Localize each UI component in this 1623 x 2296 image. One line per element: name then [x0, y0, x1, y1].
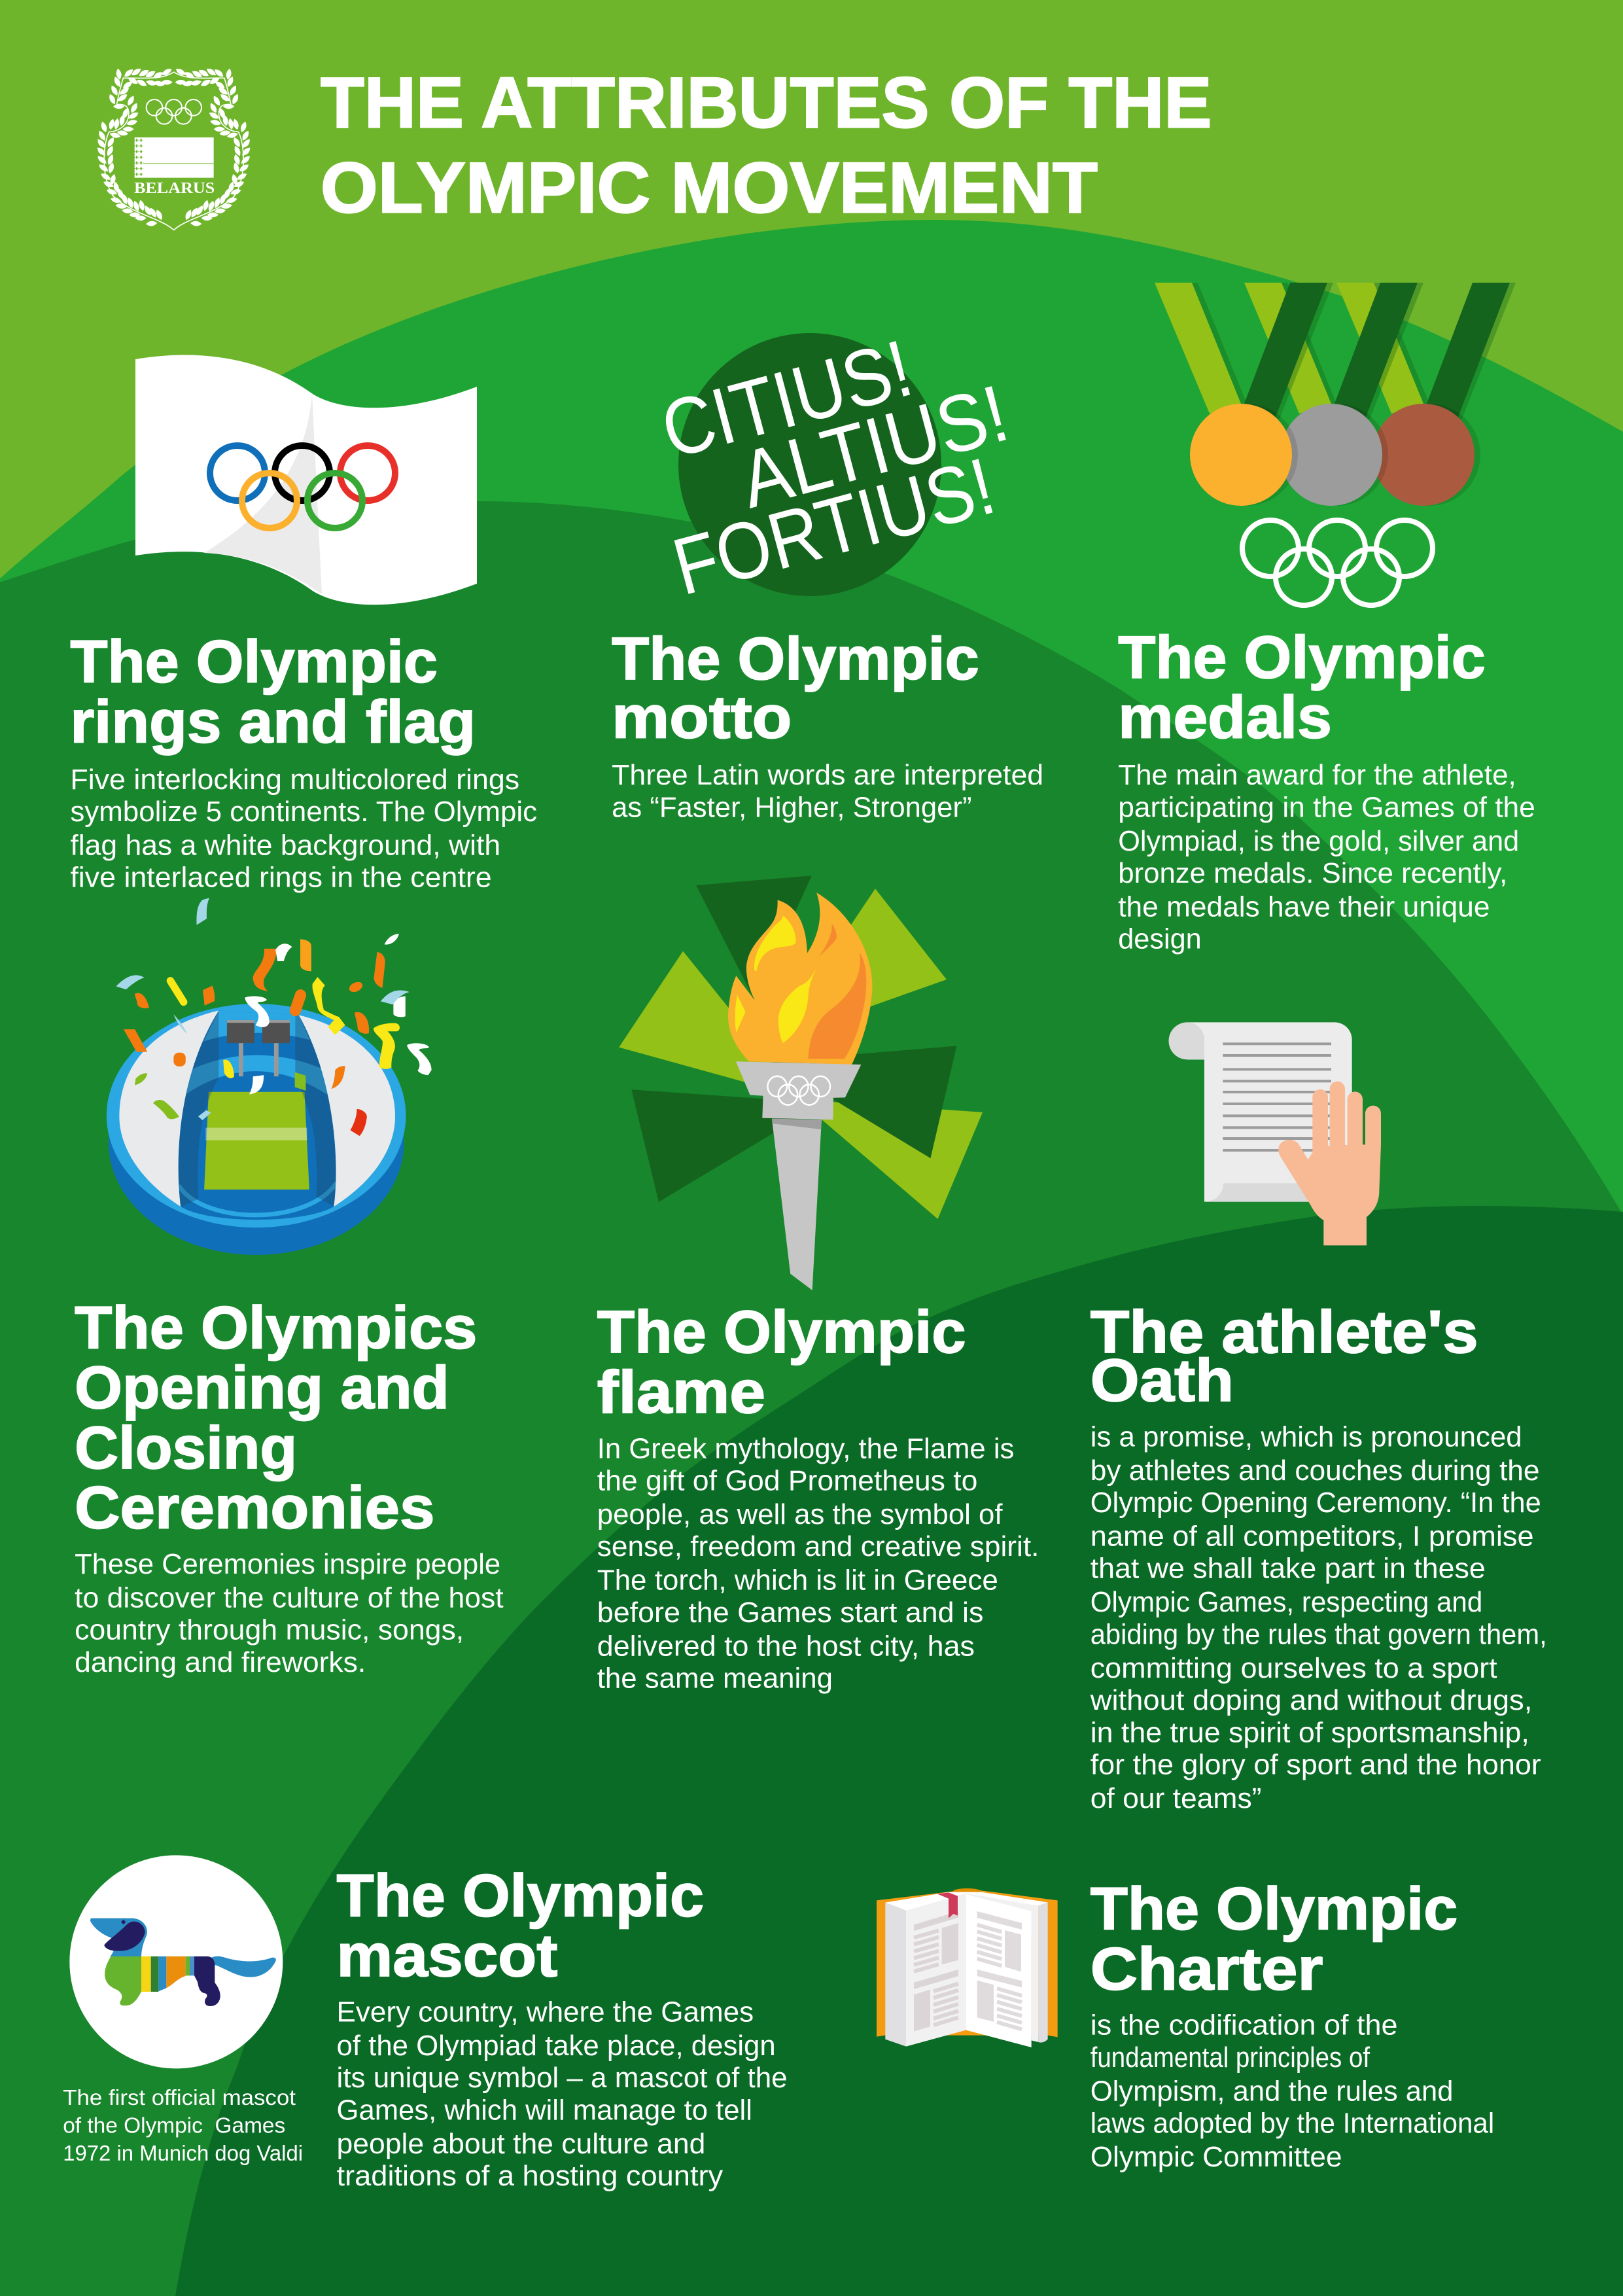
heading and text: motto [612, 626, 1043, 823]
panel: motto [612, 323, 1043, 823]
icon: Olympic torch [619, 875, 983, 1290]
heading and text: medals: The main award for the athlete, [1118, 759, 1516, 791]
heading and text: oath: that we shall take part in these [1091, 1553, 1486, 1585]
heading and text: mascot: mascot [337, 1922, 557, 1989]
panel: medals [1118, 283, 1535, 955]
heading and text: flame [597, 1299, 1039, 1694]
panel: ceremonies [75, 898, 504, 1678]
heading and text: flame: the same meaning [597, 1662, 833, 1694]
heading and text: oath: in the true spirit of sportsmanship, [1091, 1716, 1529, 1748]
title: THE ATTRIBUTES OF THE [321, 63, 1212, 143]
heading and text: medals: the medals have their unique [1118, 891, 1490, 923]
heading and text: rings and flag: Five interlocking multicolored rings [70, 764, 519, 796]
heading and text: charter: is the codification of the [1091, 2009, 1398, 2041]
heading and text: charter: Charter [1091, 1935, 1323, 2002]
heading and text: ceremonies: Opening and [75, 1354, 449, 1421]
title: OLYMPIC MOVEMENT [321, 148, 1098, 228]
caption: mascot [63, 2086, 303, 2166]
heading and text: medals: design [1118, 923, 1202, 955]
heading and text: oath [1090, 1299, 1547, 1814]
icon: motto circle with words: ALTIUS! [731, 368, 1017, 525]
heading and text: mascot: Every country, where the Games [337, 1996, 754, 2028]
heading and text: mascot: people about the culture and [337, 2128, 705, 2160]
panel: charter [877, 1876, 1494, 2173]
background wave: mid green [0, 501, 1623, 2296]
panel: flame [597, 875, 1039, 1694]
panel: oath [1090, 1022, 1547, 1814]
heading and text: mascot: of the Olympiad take place, design [337, 2030, 776, 2062]
icon: Belarus Olympic committee crest [96, 67, 252, 230]
heading and text: oath: The athlete's [1091, 1299, 1478, 1366]
panel: rings and flag [70, 355, 537, 894]
heading and text: oath: without doping and without drugs, [1090, 1684, 1532, 1716]
heading and text: rings and flag: The Olympic [70, 629, 438, 696]
heading and text: flame: sense, freedom and creative spirit. [597, 1530, 1039, 1563]
icon: motto circle with words: CITIUS! [653, 323, 921, 476]
heading and text: mascot [337, 1862, 788, 2192]
heading and text: motto: Three Latin words are interpreted [612, 759, 1043, 791]
heading and text: rings and flag: rings and flag [70, 688, 476, 755]
heading and text: flame: people, as well as the symbol of [597, 1498, 1003, 1530]
heading and text: motto: motto [612, 684, 792, 751]
heading and text: rings and flag: five interlaced rings in the centre [70, 862, 492, 894]
heading and text: charter: laws adopted by the International [1091, 2108, 1494, 2140]
heading and text: mascot: traditions of a hosting country [337, 2160, 723, 2192]
heading and text: medals: The Olympic [1118, 624, 1486, 691]
heading and text: medals: participating in the Games of the [1118, 791, 1535, 823]
icon: stadium with confetti [107, 898, 432, 1255]
heading and text: motto: The Olympic [612, 626, 979, 692]
heading and text: mascot: The Olympic [337, 1862, 704, 1929]
heading and text: oath: by athletes and couches during the [1091, 1455, 1540, 1487]
background wave: dark green [175, 1206, 1623, 2296]
heading and text: medals: medals [1118, 684, 1332, 751]
heading and text: mascot: its unique symbol – a mascot of the [337, 2062, 788, 2094]
panel: mascot [63, 1855, 788, 2192]
heading and text: medals [1118, 624, 1535, 955]
icon: open book [877, 1888, 1058, 2047]
icon: Olympic flag [135, 355, 477, 605]
heading and text: oath: committing ourselves to a sport [1091, 1652, 1497, 1684]
icon: motto circle with words: FORTIUS! [665, 441, 1003, 612]
caption: mascot: 1972 in Munich dog Valdi [63, 2142, 303, 2166]
heading and text: ceremonies: to discover the culture of the host [75, 1581, 504, 1614]
heading and text: medals: Olympiad, is the gold, silver and [1118, 825, 1519, 857]
heading and text: oath: of our teams” [1091, 1782, 1261, 1814]
caption: mascot: The first official mascot [63, 2086, 296, 2110]
heading and text: charter: fundamental principles of [1091, 2041, 1370, 2074]
caption: mascot: of the Olympic Games [63, 2114, 285, 2138]
heading and text: ceremonies: The Olympics [75, 1294, 477, 1361]
heading and text: flame: The Olympic [597, 1299, 966, 1366]
heading and text: charter: Olympic Committee [1091, 2141, 1342, 2173]
heading and text: ceremonies: Ceremonies [75, 1475, 434, 1542]
heading and text: charter [1091, 1876, 1494, 2173]
icon: mascot Valdi dog in circle [69, 1855, 283, 2068]
heading and text: oath: Olympic Games, respecting and [1091, 1586, 1482, 1618]
heading and text: flame: before the Games start and is [597, 1597, 983, 1629]
icon: medals with ribbons [1155, 283, 1516, 605]
heading and text: oath: Olympic Opening Ceremony. “In the [1091, 1487, 1541, 1519]
icon: Belarus Olympic committee crest: BELARUS [134, 180, 215, 197]
heading and text: oath: abiding by the rules that govern them, [1091, 1618, 1547, 1650]
heading and text: medals: bronze medals. Since recently, [1118, 857, 1507, 889]
heading and text: flame: The torch, which is lit in Greece [597, 1564, 998, 1597]
heading and text: flame: In Greek mythology, the Flame is [597, 1432, 1014, 1464]
heading and text: oath: for the glory of sport and the honor [1091, 1748, 1541, 1780]
heading and text: flame: delivered to the host city, has [597, 1630, 975, 1662]
icon: scroll and raised hand [1168, 1022, 1381, 1245]
heading and text: flame: flame [597, 1359, 765, 1426]
heading and text: ceremonies: dancing and fireworks. [75, 1646, 366, 1678]
heading and text: charter: Olympism, and the rules and [1091, 2075, 1454, 2107]
heading and text: rings and flag: symbolize 5 continents. The Olympic [70, 796, 537, 828]
heading and text: rings and flag: flag has a white background, with [70, 830, 500, 862]
heading and text: ceremonies: country through music, songs, [75, 1614, 464, 1646]
icon: motto circle with words [653, 323, 1017, 612]
heading and text: oath: Oath [1091, 1347, 1234, 1414]
heading and text: ceremonies [75, 1294, 504, 1678]
title [321, 63, 1212, 228]
heading and text: motto: as “Faster, Higher, Stronger” [612, 791, 972, 823]
heading and text: charter: The Olympic [1091, 1876, 1457, 1943]
heading and text: flame: the gift of God Prometheus to [597, 1464, 977, 1496]
heading and text: oath: is a promise, which is pronounced [1091, 1421, 1522, 1453]
heading and text: mascot: Games, which will manage to tell [337, 2094, 752, 2126]
heading and text: ceremonies: Closing [75, 1415, 297, 1481]
heading and text: oath: name of all competitors, I promise [1091, 1520, 1534, 1552]
heading and text: ceremonies: These Ceremonies inspire people [75, 1548, 500, 1580]
heading and text: rings and flag [70, 629, 537, 894]
